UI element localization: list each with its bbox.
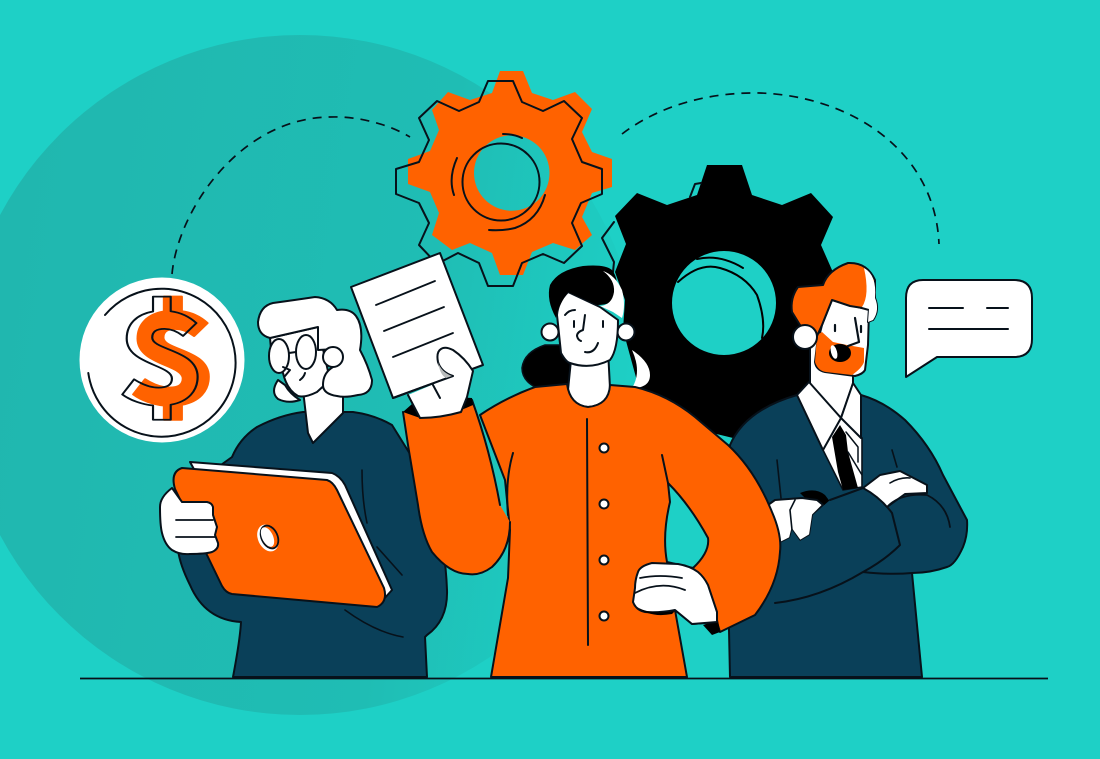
paper bbox=[351, 253, 483, 398]
forearm outline bbox=[775, 488, 912, 603]
person: centre woman bbox=[351, 253, 780, 677]
hair bbox=[792, 263, 877, 336]
sweater creases bbox=[345, 470, 403, 637]
face bbox=[270, 327, 330, 396]
mouth bbox=[829, 344, 851, 362]
ear bbox=[793, 325, 817, 349]
neck bbox=[568, 350, 610, 407]
speech bubble bbox=[906, 280, 1032, 377]
tablet camera bbox=[253, 521, 283, 555]
head bbox=[557, 292, 618, 366]
hair top bbox=[549, 266, 617, 318]
hand on tablet bbox=[160, 488, 218, 554]
sweater bbox=[178, 412, 447, 677]
suit bbox=[729, 395, 967, 677]
front forearm bbox=[775, 488, 900, 603]
icon: orange gear bbox=[396, 71, 612, 286]
dress seams bbox=[507, 419, 668, 645]
dashed arc left bbox=[172, 117, 410, 274]
right hand bbox=[863, 471, 927, 507]
buttons bbox=[600, 444, 608, 620]
hair highlight bbox=[862, 268, 877, 322]
icon: black gear bbox=[602, 165, 852, 447]
glasses bbox=[269, 335, 316, 380]
lower left hair bbox=[274, 380, 300, 402]
ears bbox=[542, 324, 634, 340]
hair back right bbox=[632, 350, 650, 388]
icon: dollar coin: $ bbox=[127, 259, 219, 441]
dashed arc right bbox=[622, 93, 939, 244]
hand holding paper bbox=[393, 348, 473, 418]
sleeve outline bbox=[403, 400, 510, 574]
neck bbox=[303, 385, 343, 443]
ear bbox=[323, 347, 343, 367]
icon: dollar coin: $ bbox=[116, 259, 208, 441]
neck bbox=[810, 340, 853, 418]
hair highlight bbox=[600, 271, 624, 318]
face features bbox=[565, 310, 603, 352]
tablet bbox=[174, 462, 392, 607]
person: left woman bbox=[178, 297, 447, 677]
suit seams bbox=[777, 450, 897, 498]
tie bbox=[832, 425, 862, 490]
shirt bbox=[823, 418, 862, 490]
face bbox=[815, 300, 869, 376]
left hand bbox=[768, 490, 831, 543]
rear forearm crease bbox=[887, 495, 950, 527]
hair bbox=[258, 297, 372, 397]
dress bbox=[480, 384, 780, 677]
icon: dollar coin bbox=[80, 259, 244, 442]
hand on hip bbox=[633, 563, 720, 635]
person: right man bbox=[729, 263, 967, 677]
background circle bbox=[0, 35, 640, 715]
eyes and nose bbox=[835, 318, 861, 346]
hair back left bbox=[522, 345, 590, 388]
raised sleeve bbox=[403, 400, 510, 574]
ground line bbox=[80, 678, 1048, 680]
beard bbox=[815, 332, 864, 375]
collar bbox=[797, 382, 861, 450]
cuff bbox=[403, 395, 473, 418]
